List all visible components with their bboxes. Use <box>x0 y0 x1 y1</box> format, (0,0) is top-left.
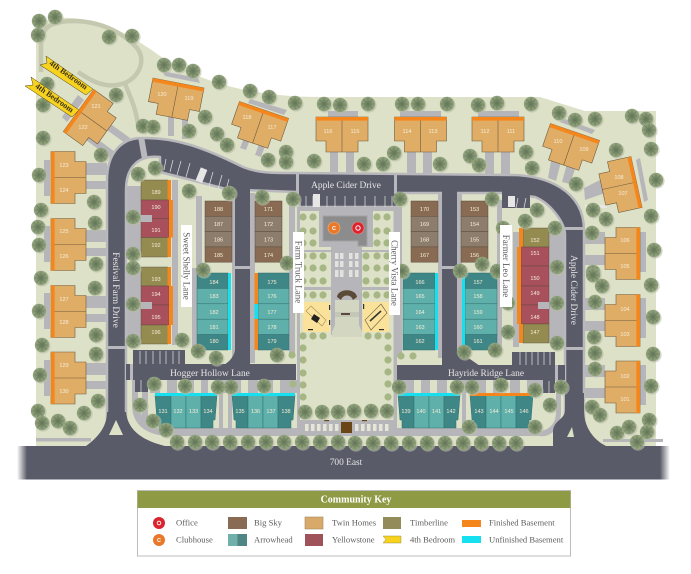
arrowhead block 184-180: 180 <box>209 339 219 345</box>
orchard shrubs <box>288 213 417 401</box>
key: 4th bedroom: 4th Bedroom <box>410 534 455 544</box>
arrowhead block 157-161: 159 <box>473 310 483 316</box>
arrowhead block 175-179 <box>254 273 289 350</box>
twin homes: 125-126: 125 <box>59 229 69 235</box>
mixed block 152-147: 147 <box>530 330 540 336</box>
key: big sky: Big Sky <box>254 518 283 528</box>
arrowhead block 135-138: 138 <box>281 409 291 415</box>
arrowhead block 131-134: 134 <box>203 409 213 415</box>
big sky block 153-156: 154 <box>470 222 479 228</box>
road: side streets <box>86 186 606 446</box>
key: yellowstone: Yellowstone <box>332 534 375 544</box>
twin homes: 104-103 <box>605 294 640 346</box>
arrowhead block 175-179: 175 <box>267 280 277 286</box>
mixed block 152-147: 151 <box>530 251 540 257</box>
big sky block 170-167: 167 <box>420 253 429 259</box>
mixed block 193-196: 194 <box>151 292 161 298</box>
parking stripes <box>140 159 550 393</box>
big sky block 171-174: 174 <box>264 253 273 259</box>
twin homes: 120-119 <box>146 78 204 122</box>
park path <box>41 21 141 132</box>
arrowhead block 135-138: 137 <box>266 409 276 415</box>
twin homes: 112-111 <box>472 117 524 152</box>
arrowhead block 135-138: 136 <box>251 409 260 415</box>
arrowhead block 175-179: 179 <box>267 339 277 345</box>
twin homes: 106-105 <box>605 228 640 280</box>
key: timberline <box>383 517 448 529</box>
mixed block 152-147: 150 <box>530 276 540 282</box>
traffic islands <box>109 420 574 437</box>
mixed block 189-192: 191 <box>151 228 161 234</box>
banner: 4th Bedroom upper: 4th Bedroom <box>48 58 90 92</box>
road label: Festival Farm Drive: Festival Farm Drive <box>110 252 120 328</box>
twin homes: 102-101: 102 <box>620 374 630 380</box>
key: twin homes <box>305 517 377 529</box>
arrowhead block 157-161 <box>462 273 497 350</box>
twin homes: 120-119: 120 <box>157 92 167 98</box>
twin homes: 127-128: 128 <box>59 320 69 326</box>
ground <box>36 18 656 446</box>
big sky block 171-174 <box>255 201 282 262</box>
twin homes: 110-109: 109 <box>579 147 589 153</box>
arrowhead block 143-146: 146 <box>519 409 529 415</box>
big sky block 171-174: 171 <box>264 207 273 213</box>
arrowhead block 157-161: 160 <box>473 325 483 331</box>
crosswalks <box>107 138 584 381</box>
big sky block 188-185: 185 <box>214 253 223 259</box>
street tag: Sweet Shelly Lane: Sweet Shelly Lane <box>182 232 192 300</box>
twin homes: 114-113: 114 <box>403 129 411 135</box>
arrowhead block 157-161: 158 <box>473 294 483 300</box>
road label: Hogger Hollow Lane: Hogger Hollow Lane <box>170 369 250 379</box>
key: big sky <box>228 517 283 529</box>
twin homes: 104-103: 104 <box>620 307 630 313</box>
arrowhead block 135-138: 135 <box>235 409 245 415</box>
big sky block 170-167: 170 <box>420 207 429 213</box>
arrowhead block 143-146: 143 <box>474 409 484 415</box>
panel: community key <box>138 490 570 556</box>
mixed block 152-147: 149 <box>530 291 540 297</box>
road label: Hayride Ridge Lane: Hayride Ridge Lane <box>448 369 524 379</box>
arrowhead block 143-146 <box>470 393 533 428</box>
street tag: Farmer Leo Lane <box>500 225 512 307</box>
twin homes: 116-115: 115 <box>351 129 359 135</box>
arrowhead block 184-180: 182 <box>209 310 219 316</box>
icon: clubhouse marker <box>328 222 340 234</box>
twin homes: 110-109 <box>539 124 600 174</box>
twin homes: 102-101 <box>605 361 640 413</box>
twin homes: 118-117: 117 <box>268 125 276 131</box>
icon: clubhouse marker: C <box>332 226 336 232</box>
trees <box>31 10 665 452</box>
playground left <box>303 302 330 332</box>
big sky block 170-167 <box>411 201 438 262</box>
mixed block 193-196 <box>141 267 173 344</box>
key: yellowstone <box>305 534 375 546</box>
big sky block 188-185: 186 <box>214 238 223 244</box>
road: ring <box>107 138 584 446</box>
twin homes: 112-111: 111 <box>507 129 515 135</box>
big sky block 188-185 <box>205 201 232 262</box>
twin homes: 127-128: 127 <box>59 297 69 303</box>
arrowhead block 184-180: 181 <box>209 325 219 331</box>
twin homes: 102-101: 101 <box>620 397 630 403</box>
twin homes: 123-124: 123 <box>59 163 69 169</box>
key header: Community Key <box>321 494 391 506</box>
arrowhead block 184-180: 184 <box>209 280 219 286</box>
arrowhead block 184-180: 183 <box>209 294 219 300</box>
twin homes: 108-107: 108 <box>614 175 624 181</box>
arrowhead block 175-179: 176 <box>267 294 277 300</box>
arrowhead block 139-142: 142 <box>446 409 456 415</box>
twin homes: 112-111: 112 <box>481 129 489 135</box>
big sky block 170-167: 169 <box>420 222 429 228</box>
big sky block 188-185: 188 <box>214 207 223 213</box>
key: clubhouse: Clubhouse <box>176 534 213 544</box>
arrowhead block 135-138 <box>232 393 295 428</box>
arrowhead block 184-180 <box>197 273 231 350</box>
arrowhead block 175-179: 177 <box>267 310 277 316</box>
arrowhead block 139-142: 140 <box>416 409 426 415</box>
twin homes: 129-130: 129 <box>59 363 69 369</box>
twin homes: 106-105: 106 <box>620 238 630 244</box>
key: finished basement: Finished Basement <box>489 518 555 528</box>
arrowhead block 131-134 <box>155 393 217 428</box>
twin homes: 110-109: 110 <box>554 139 562 145</box>
icon: office marker <box>352 222 364 234</box>
mixed block 152-147 <box>517 228 549 343</box>
mixed block 189-192: 189 <box>151 190 161 196</box>
big sky block 153-156: 156 <box>470 253 479 259</box>
twin homes: 106-105: 105 <box>620 264 630 270</box>
banner: 4th Bedroom lower: 4th Bedroom <box>34 81 76 115</box>
mixed block 189-192: 192 <box>151 243 161 249</box>
playgrounds <box>303 302 389 332</box>
plaque <box>341 422 352 433</box>
twin homes: 118-117: 118 <box>243 115 251 121</box>
twin homes: 108-107 <box>597 157 642 215</box>
twin homes: 123-124: 124 <box>59 188 69 194</box>
key: timberline: Timberline <box>410 518 448 528</box>
twin homes: 114-113 <box>394 117 446 152</box>
arrowhead block 166-162: 163 <box>415 325 425 331</box>
arrowhead block 166-162: 166 <box>415 280 425 286</box>
big sky block 171-174: 172 <box>264 222 273 228</box>
mixed block 193-196: 193 <box>151 277 161 283</box>
street tag: Cherry Vista Lane: Cherry Vista Lane <box>390 240 400 306</box>
twin homes: 116-115: 116 <box>324 129 332 135</box>
key: clubhouse <box>153 534 213 546</box>
arrowhead block 166-162: 162 <box>415 339 425 345</box>
twin homes: 125-126: 126 <box>59 254 69 260</box>
big sky block 171-174: 173 <box>264 238 273 244</box>
key: twin homes: Twin Homes <box>332 518 377 528</box>
twin homes: 125-126 <box>51 218 86 270</box>
twin homes: 118-117 <box>228 102 289 152</box>
key: unfinished basement: Unfinished Basement <box>489 534 564 544</box>
twin homes: 127-128 <box>51 286 86 338</box>
amphitheatre <box>337 290 357 300</box>
central lawn <box>332 300 362 337</box>
mixed block 152-147: 148 <box>530 315 540 321</box>
key: office: Office <box>176 518 198 528</box>
twin homes: 121-122: 121 <box>91 104 101 110</box>
central plaza <box>297 207 397 433</box>
twin homes: 108-107: 107 <box>618 191 628 197</box>
twin homes: 121-122 <box>63 89 122 152</box>
arrowhead block 166-162: 164 <box>415 310 425 316</box>
plaza walkways <box>297 207 397 432</box>
arrowhead block 131-134: 131 <box>158 409 168 415</box>
twin homes: 129-130 <box>51 352 86 404</box>
mixed block 189-192: 190 <box>151 205 161 211</box>
key header <box>138 491 570 508</box>
driveways and sidewalks <box>36 71 663 442</box>
arrowhead block 139-142: 139 <box>401 409 411 415</box>
arrowhead block 139-142 <box>398 393 460 428</box>
mixed block 152-147: 152 <box>530 238 540 244</box>
key: 4th bedroom <box>383 534 455 544</box>
arrowhead block 131-134: 132 <box>173 409 183 415</box>
road label: 700 East: 700 East <box>330 458 363 468</box>
key: office <box>153 517 198 529</box>
arrowhead block 157-161: 157 <box>473 280 483 286</box>
big sky block 153-156 <box>461 201 488 262</box>
bottom paving <box>305 424 388 431</box>
twin homes: 116-115 <box>316 117 368 152</box>
road: 700 East <box>17 446 670 480</box>
twin homes: 104-103: 103 <box>620 332 630 338</box>
arrowhead block 143-146: 145 <box>504 409 514 415</box>
twin homes: 121-122: 122 <box>78 125 88 131</box>
arrowhead block 166-162: 165 <box>415 294 425 300</box>
twin homes: 120-119: 119 <box>185 96 193 102</box>
arrowhead block 157-161: 161 <box>473 339 483 345</box>
clubhouse building <box>323 216 367 246</box>
big sky block 188-185: 187 <box>214 222 223 228</box>
big sky block 153-156: 153 <box>470 207 479 213</box>
banner: 4th Bedroom upper <box>40 56 93 95</box>
mixed block 193-196: 195 <box>151 315 161 321</box>
playground right <box>363 302 389 332</box>
twin homes: 129-130: 130 <box>59 389 69 395</box>
twin homes: 123-124 <box>51 152 86 204</box>
key: arrowhead: Arrowhead <box>254 534 293 544</box>
arrowhead block 175-179: 178 <box>267 325 277 331</box>
arrowhead block 143-146: 144 <box>489 409 499 415</box>
key: clubhouse: C <box>157 538 161 544</box>
arrowhead block 166-162 <box>403 273 438 350</box>
big sky block 153-156: 155 <box>470 238 479 244</box>
street tag: Farmer Leo Lane: Farmer Leo Lane <box>501 235 511 297</box>
banner: 4th Bedroom lower <box>25 77 79 117</box>
street tag: Farm Truck Lane: Farm Truck Lane <box>294 241 304 303</box>
arrowhead block 139-142: 141 <box>432 409 441 415</box>
mixed block 193-196: 196 <box>151 330 161 336</box>
mixed block 189-192 <box>141 180 173 257</box>
key: arrowhead <box>228 534 293 546</box>
arrowhead block 131-134: 133 <box>189 409 198 415</box>
road label: Apple Cider Drive (top): Apple Cider Drive <box>311 181 381 191</box>
paving tiles <box>335 253 358 277</box>
big sky block 170-167: 168 <box>420 238 429 244</box>
twin homes: 114-113: 113 <box>429 129 437 135</box>
road label: Apple Cider Drive (side): Apple Cider Drive <box>568 255 578 325</box>
